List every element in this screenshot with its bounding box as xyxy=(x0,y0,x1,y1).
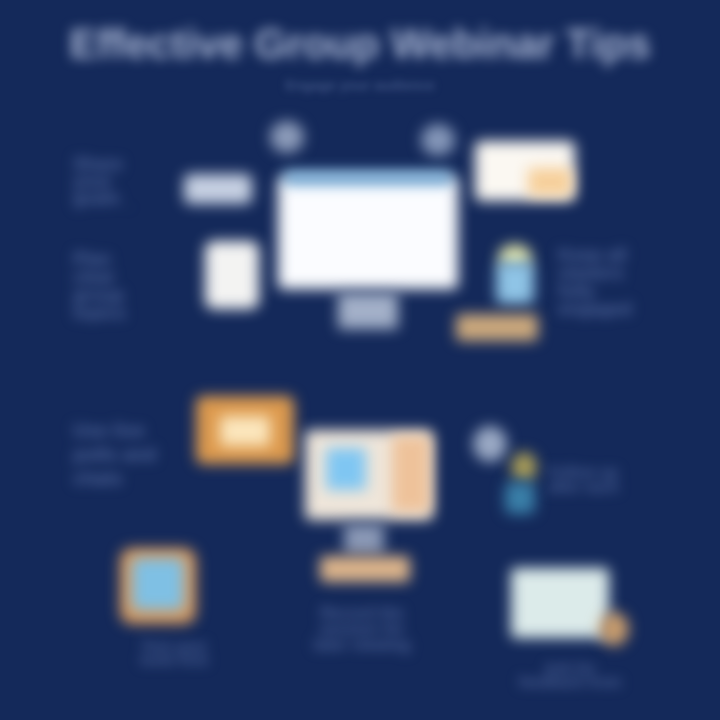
subtitle: Engage your audience xyxy=(285,77,435,93)
screen blue panel xyxy=(326,448,366,490)
card: top right xyxy=(464,130,587,212)
chat label xyxy=(184,174,252,204)
tablet screen xyxy=(132,558,184,610)
icon: phone xyxy=(205,241,259,309)
caption: second monitor: Record the session for later viewing xyxy=(314,606,410,654)
title: Effective Group Webinar Tips xyxy=(70,20,650,67)
icon: laptop with pointer xyxy=(500,556,639,656)
main monitor xyxy=(266,161,470,339)
speaker accent xyxy=(511,452,537,482)
pointer xyxy=(599,612,629,646)
presenter desk xyxy=(456,314,538,341)
presenter body xyxy=(496,262,534,304)
tablet frame xyxy=(120,548,196,624)
text block: left lower: Use live polls and chats xyxy=(73,421,156,490)
monitor stand xyxy=(338,293,398,329)
screen frame xyxy=(305,430,433,520)
orange frame xyxy=(196,396,294,464)
monitor stand xyxy=(344,524,384,554)
card base xyxy=(475,141,575,201)
icon: right top circle xyxy=(421,124,455,156)
icon: speaker xyxy=(464,417,546,522)
second monitor xyxy=(294,418,445,594)
laptop screen xyxy=(511,568,609,638)
speaker head xyxy=(473,426,507,462)
speaker body xyxy=(505,482,535,514)
icon: tablet xyxy=(109,537,207,635)
slide center xyxy=(220,416,270,446)
card: orange slide xyxy=(184,384,306,476)
icon: presenter xyxy=(445,234,549,352)
icon: left top circle xyxy=(270,121,304,153)
presenter head xyxy=(498,244,532,270)
screen right accent xyxy=(392,436,430,512)
card accent xyxy=(528,168,572,196)
screen xyxy=(278,177,458,289)
screen top bar xyxy=(284,171,452,185)
monitor base xyxy=(320,556,410,582)
